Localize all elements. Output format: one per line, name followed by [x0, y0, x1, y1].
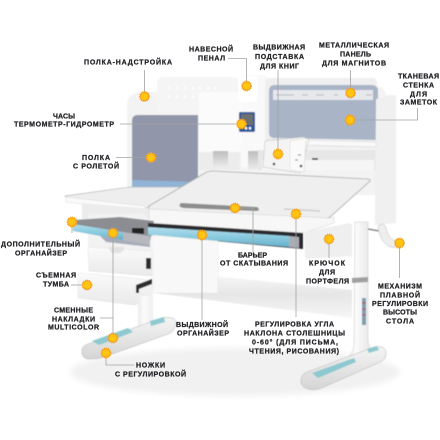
- label: tilt adjust: РЕГУЛИРОВКА УГЛА: [255, 322, 334, 328]
- label: fabric wall: СТЕНКА: [403, 82, 434, 90]
- label: crank: ВЫСОТЫ: [383, 310, 417, 316]
- label: book stand: [253, 44, 305, 70]
- label: crank: СТОЛА: [386, 318, 414, 326]
- center shadow under shelf: [199, 150, 378, 170]
- label: metal panel: ДЛЯ МАГНИТОВ: [322, 60, 386, 68]
- label: tilt adjust: НАКЛОНА СТОЛЕШНИЦЫ: [244, 330, 345, 338]
- label: overlays: СМЕННЫЕ: [54, 308, 93, 314]
- label: crank: МЕХАНИЗМ: [378, 284, 422, 290]
- label: metal panel: [319, 42, 389, 68]
- label: shelf hutch: ПОЛКА-НАДСТРОЙКА: [84, 58, 172, 66]
- label: main organizer: ОРГАНАЙЗЕР: [177, 328, 229, 338]
- label: book stand: ПОДСТАВКА: [255, 54, 304, 61]
- left tabletop: [65, 187, 190, 220]
- marker: metal panel: [346, 88, 355, 98]
- label: feet: НОЖКИ: [136, 362, 165, 370]
- marker: roller shelf: [146, 153, 156, 162]
- hook panel: [304, 223, 352, 259]
- right side panel: [375, 95, 396, 225]
- marker: barrier: [230, 203, 240, 213]
- label: fabric wall: ТКАНЕВАЯ: [398, 74, 439, 80]
- label: roller shelf: С РОЛЕТОЙ: [73, 162, 119, 170]
- shelf peg holes: [168, 87, 216, 98]
- label: feet: [115, 362, 186, 378]
- label: extra organizer: [1, 240, 80, 258]
- label: extra organizer: ДОПОЛНИТЕЛЬНЫЙ: [1, 240, 80, 248]
- marker: crank: [395, 238, 404, 248]
- label: barrier: [220, 252, 288, 268]
- label: clock: [14, 114, 114, 128]
- label: fabric wall: [398, 74, 439, 106]
- label: overlays: НАКЛАДКИ: [52, 316, 95, 324]
- marker: fabric wall: [345, 115, 355, 125]
- under-desk rear beam: [153, 270, 352, 318]
- label: roller shelf: ПОЛКА: [82, 155, 110, 162]
- rail: [268, 139, 376, 147]
- label: clock: ЧАСЫ: [53, 114, 75, 120]
- label: pedestal: [36, 272, 76, 288]
- marker: main organizer: [197, 230, 207, 240]
- label: pencil case: ПЕНАЛ: [198, 56, 225, 62]
- marker: overlay foot: [108, 333, 118, 343]
- marker: pencil case: [242, 81, 251, 91]
- label: clock: ТЕРМОМЕТР-ГИДРОМЕТР: [14, 122, 114, 128]
- fabric wall and metal panel: [269, 85, 378, 140]
- pencil case: [238, 76, 257, 102]
- label: roller shelf: [73, 155, 119, 170]
- label: pedestal: ТУМБА: [43, 282, 69, 288]
- label: pencil case: [189, 44, 233, 62]
- label: book stand: ВЫДВИЖНАЯ: [253, 44, 305, 52]
- label: pencil case: НАВЕСНОЙ: [189, 44, 233, 54]
- hutch body: [127, 75, 396, 195]
- label: bag hook: КРЮЧОК: [309, 260, 346, 268]
- label: tilt adjust: [244, 322, 345, 356]
- callout leader lines: [71, 58, 418, 365]
- label: fabric wall: ДЛЯ: [410, 92, 427, 98]
- marker: pedestal: [82, 280, 92, 290]
- label: extra organizer: ОРГАНАЙЗЕР: [15, 248, 67, 258]
- label: main organizer: ВЫДВИЖНОЙ: [176, 320, 228, 329]
- label: fabric wall: ЗАМЕТОК: [400, 100, 438, 106]
- label: bag hook: [306, 260, 349, 286]
- marker: tilt: [291, 209, 301, 219]
- label: overlays: [48, 308, 99, 332]
- desk illustration: [65, 75, 400, 396]
- book stand: [263, 137, 318, 173]
- left leg: [82, 296, 176, 359]
- label: tilt adjust: 0-60° (ДЛЯ ПИСЬМА,: [252, 338, 338, 346]
- label: main organizer: [176, 320, 229, 338]
- label: barrier: ОТ СКАТЫВАНИЯ: [220, 260, 288, 268]
- marker: shelf hutch: [140, 92, 149, 101]
- label: bag hook: ДЛЯ: [319, 270, 335, 276]
- label: crank: РЕГУЛИРОВКИ: [372, 301, 428, 308]
- extra organizer drawer: [72, 214, 154, 254]
- marker: book stand: [273, 149, 283, 159]
- label: barrier: БАРЬЕР: [238, 252, 267, 260]
- right leg: [301, 222, 386, 390]
- removable pedestal: [78, 247, 152, 305]
- label: tilt adjust: ЧТЕНИЯ, РИСОВАНИЯ): [249, 348, 339, 356]
- label: book stand: ДЛЯ КНИГ: [260, 64, 299, 70]
- roller shutter shelf: [132, 115, 198, 188]
- marker: overlay drawer: [108, 228, 118, 238]
- marker: adjustable feet: [101, 348, 111, 358]
- cabinet panel: [153, 235, 218, 293]
- label: bag hook: ПОРТФЕЛЯ: [306, 278, 349, 286]
- marker: bag hook: [324, 234, 334, 244]
- marker: extra organizer: [67, 217, 77, 227]
- marker: clock: [237, 119, 246, 129]
- label: pedestal: СЪЕМНАЯ: [36, 272, 76, 280]
- floor shadow: [70, 348, 400, 396]
- label: metal panel: МЕТАЛЛИЧЕСКАЯ: [319, 42, 389, 50]
- label: metal panel: ПАНЕЛЬ: [340, 52, 371, 58]
- main organizer drawer: [148, 223, 303, 249]
- label: crank: [372, 284, 428, 326]
- label: overlays: MULTICOLOR: [48, 324, 99, 332]
- label: feet: С РЕГУЛИРОВКОЙ: [115, 370, 186, 378]
- clock thermometer: [239, 112, 255, 132]
- tilting tabletop: [149, 171, 370, 233]
- height crank: [368, 224, 399, 248]
- label: crank: ПЛАВНОЙ: [380, 290, 420, 300]
